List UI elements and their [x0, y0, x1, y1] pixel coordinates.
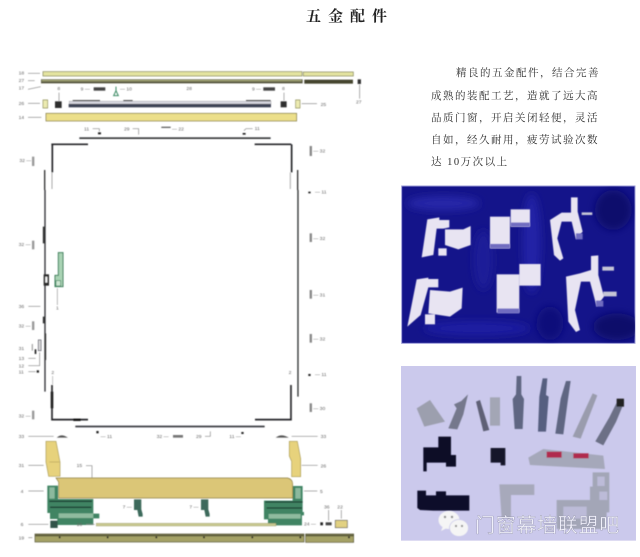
- window frame: [19, 126, 325, 190]
- top rails and sash parts: 27: [356, 100, 362, 106]
- right side fittings: — 11: [315, 372, 327, 378]
- bottom rails and corner parts: 4: [21, 489, 24, 495]
- left side fittings: 11: [19, 369, 24, 375]
- bottom rails and corner parts: 32 —: [157, 434, 169, 440]
- left side fittings: 12: [19, 363, 24, 369]
- bottom rails and corner parts: — 11: [101, 434, 112, 440]
- top rails and sash parts: — 10: [120, 87, 132, 93]
- bottom rails and corner parts: 24 —: [304, 522, 316, 528]
- exploded hardware diagram: [19, 70, 362, 542]
- top rails and sash parts: 9 —: [81, 87, 90, 93]
- left side fittings: 32 —: [19, 413, 31, 419]
- left side fittings: 2: [51, 370, 54, 376]
- top rails and sash parts: 8: [57, 86, 60, 92]
- top rails and sash parts: 14: [19, 115, 24, 121]
- left side fittings: 32 —: [19, 323, 31, 329]
- description text: [431, 66, 600, 168]
- top rails and sash parts: 25: [321, 102, 326, 108]
- description text: 品质门窗，开启关闭轻便，灵活: [431, 111, 599, 124]
- bottom rails and corner parts: 31: [19, 463, 24, 469]
- right side fittings: — 32: [313, 236, 325, 242]
- description text: 精良的五金配件，结合完善: [456, 66, 600, 79]
- window frame: 32 —: [19, 158, 31, 164]
- bottom rails and corner parts: 33: [321, 434, 326, 440]
- bottom rails and corner parts: 6: [21, 522, 24, 528]
- top rails and sash parts: [19, 70, 362, 121]
- bottom rails and corner parts: 11 —: [229, 434, 241, 440]
- top row of locks and hinges: [417, 376, 624, 445]
- bottom rails and corner parts: 26: [321, 463, 326, 469]
- photo: grey and black hardware components: [401, 366, 636, 541]
- bottom rails and corner parts: 29: [196, 434, 202, 440]
- bottom rails and corner parts: 7 —: [189, 504, 198, 510]
- sliding roller carriage: [528, 449, 605, 469]
- bottom rails and corner parts: 22: [337, 504, 343, 510]
- description text: 成熟的装配工艺，造就了远大高: [431, 89, 599, 102]
- window frame: 11: [255, 126, 260, 132]
- title: 五金配件: [306, 7, 394, 25]
- top rails and sash parts: 27: [19, 78, 24, 84]
- right side fittings: 2: [289, 370, 292, 376]
- bottom rails and corner parts: 33: [19, 434, 24, 440]
- bottom rails and corner parts: 15: [77, 463, 82, 469]
- left side fittings: 36: [19, 304, 24, 310]
- right side fittings: — 32: [313, 337, 325, 343]
- top rails and sash parts: 9 —: [252, 87, 261, 93]
- bottom rails and corner parts: 7 —: [123, 504, 132, 510]
- window frame: 11: [84, 126, 89, 132]
- right side fittings: — 30: [313, 406, 325, 412]
- left side fittings: 13: [19, 356, 24, 362]
- top rails and sash parts: 26: [19, 101, 24, 107]
- left side fittings: 1: [56, 305, 59, 311]
- window frame: — 32: [313, 149, 325, 155]
- bottom rails and corner parts: 19: [19, 535, 24, 541]
- bottom rails and corner parts: [19, 426, 354, 542]
- left side fittings: [19, 190, 88, 421]
- photo: white window handles and hinges on blue: [402, 186, 640, 343]
- window frame: 29: [124, 126, 130, 132]
- right side fittings: — 11: [315, 189, 327, 195]
- description text: 达 10万次以上: [431, 155, 509, 168]
- bottom rails and corner parts: 36: [324, 504, 330, 510]
- watermark: wechat icon and account name: [438, 511, 620, 537]
- bottom rails and corner parts: 5: [320, 489, 323, 495]
- left side fittings: 31: [19, 346, 24, 352]
- watermark: wechat icon and account name: 门窗幕墙联盟吧: [475, 514, 620, 537]
- top rails and sash parts: 18: [19, 70, 24, 76]
- black plastic parts: [423, 437, 456, 471]
- window frame: — 22: [172, 126, 184, 132]
- right side fittings: — 31: [313, 293, 325, 299]
- right side fittings: [255, 189, 327, 420]
- bottom rails and corner parts: 16: [77, 522, 82, 528]
- grey corner brackets: [499, 484, 534, 518]
- left side fittings: 32 —: [19, 242, 31, 248]
- top rails and sash parts: 28: [186, 86, 192, 92]
- description text: 自如，经久耐用，疲劳试验次数: [431, 133, 599, 146]
- top rails and sash parts: 8: [282, 86, 285, 92]
- top rails and sash parts: 17: [19, 85, 24, 91]
